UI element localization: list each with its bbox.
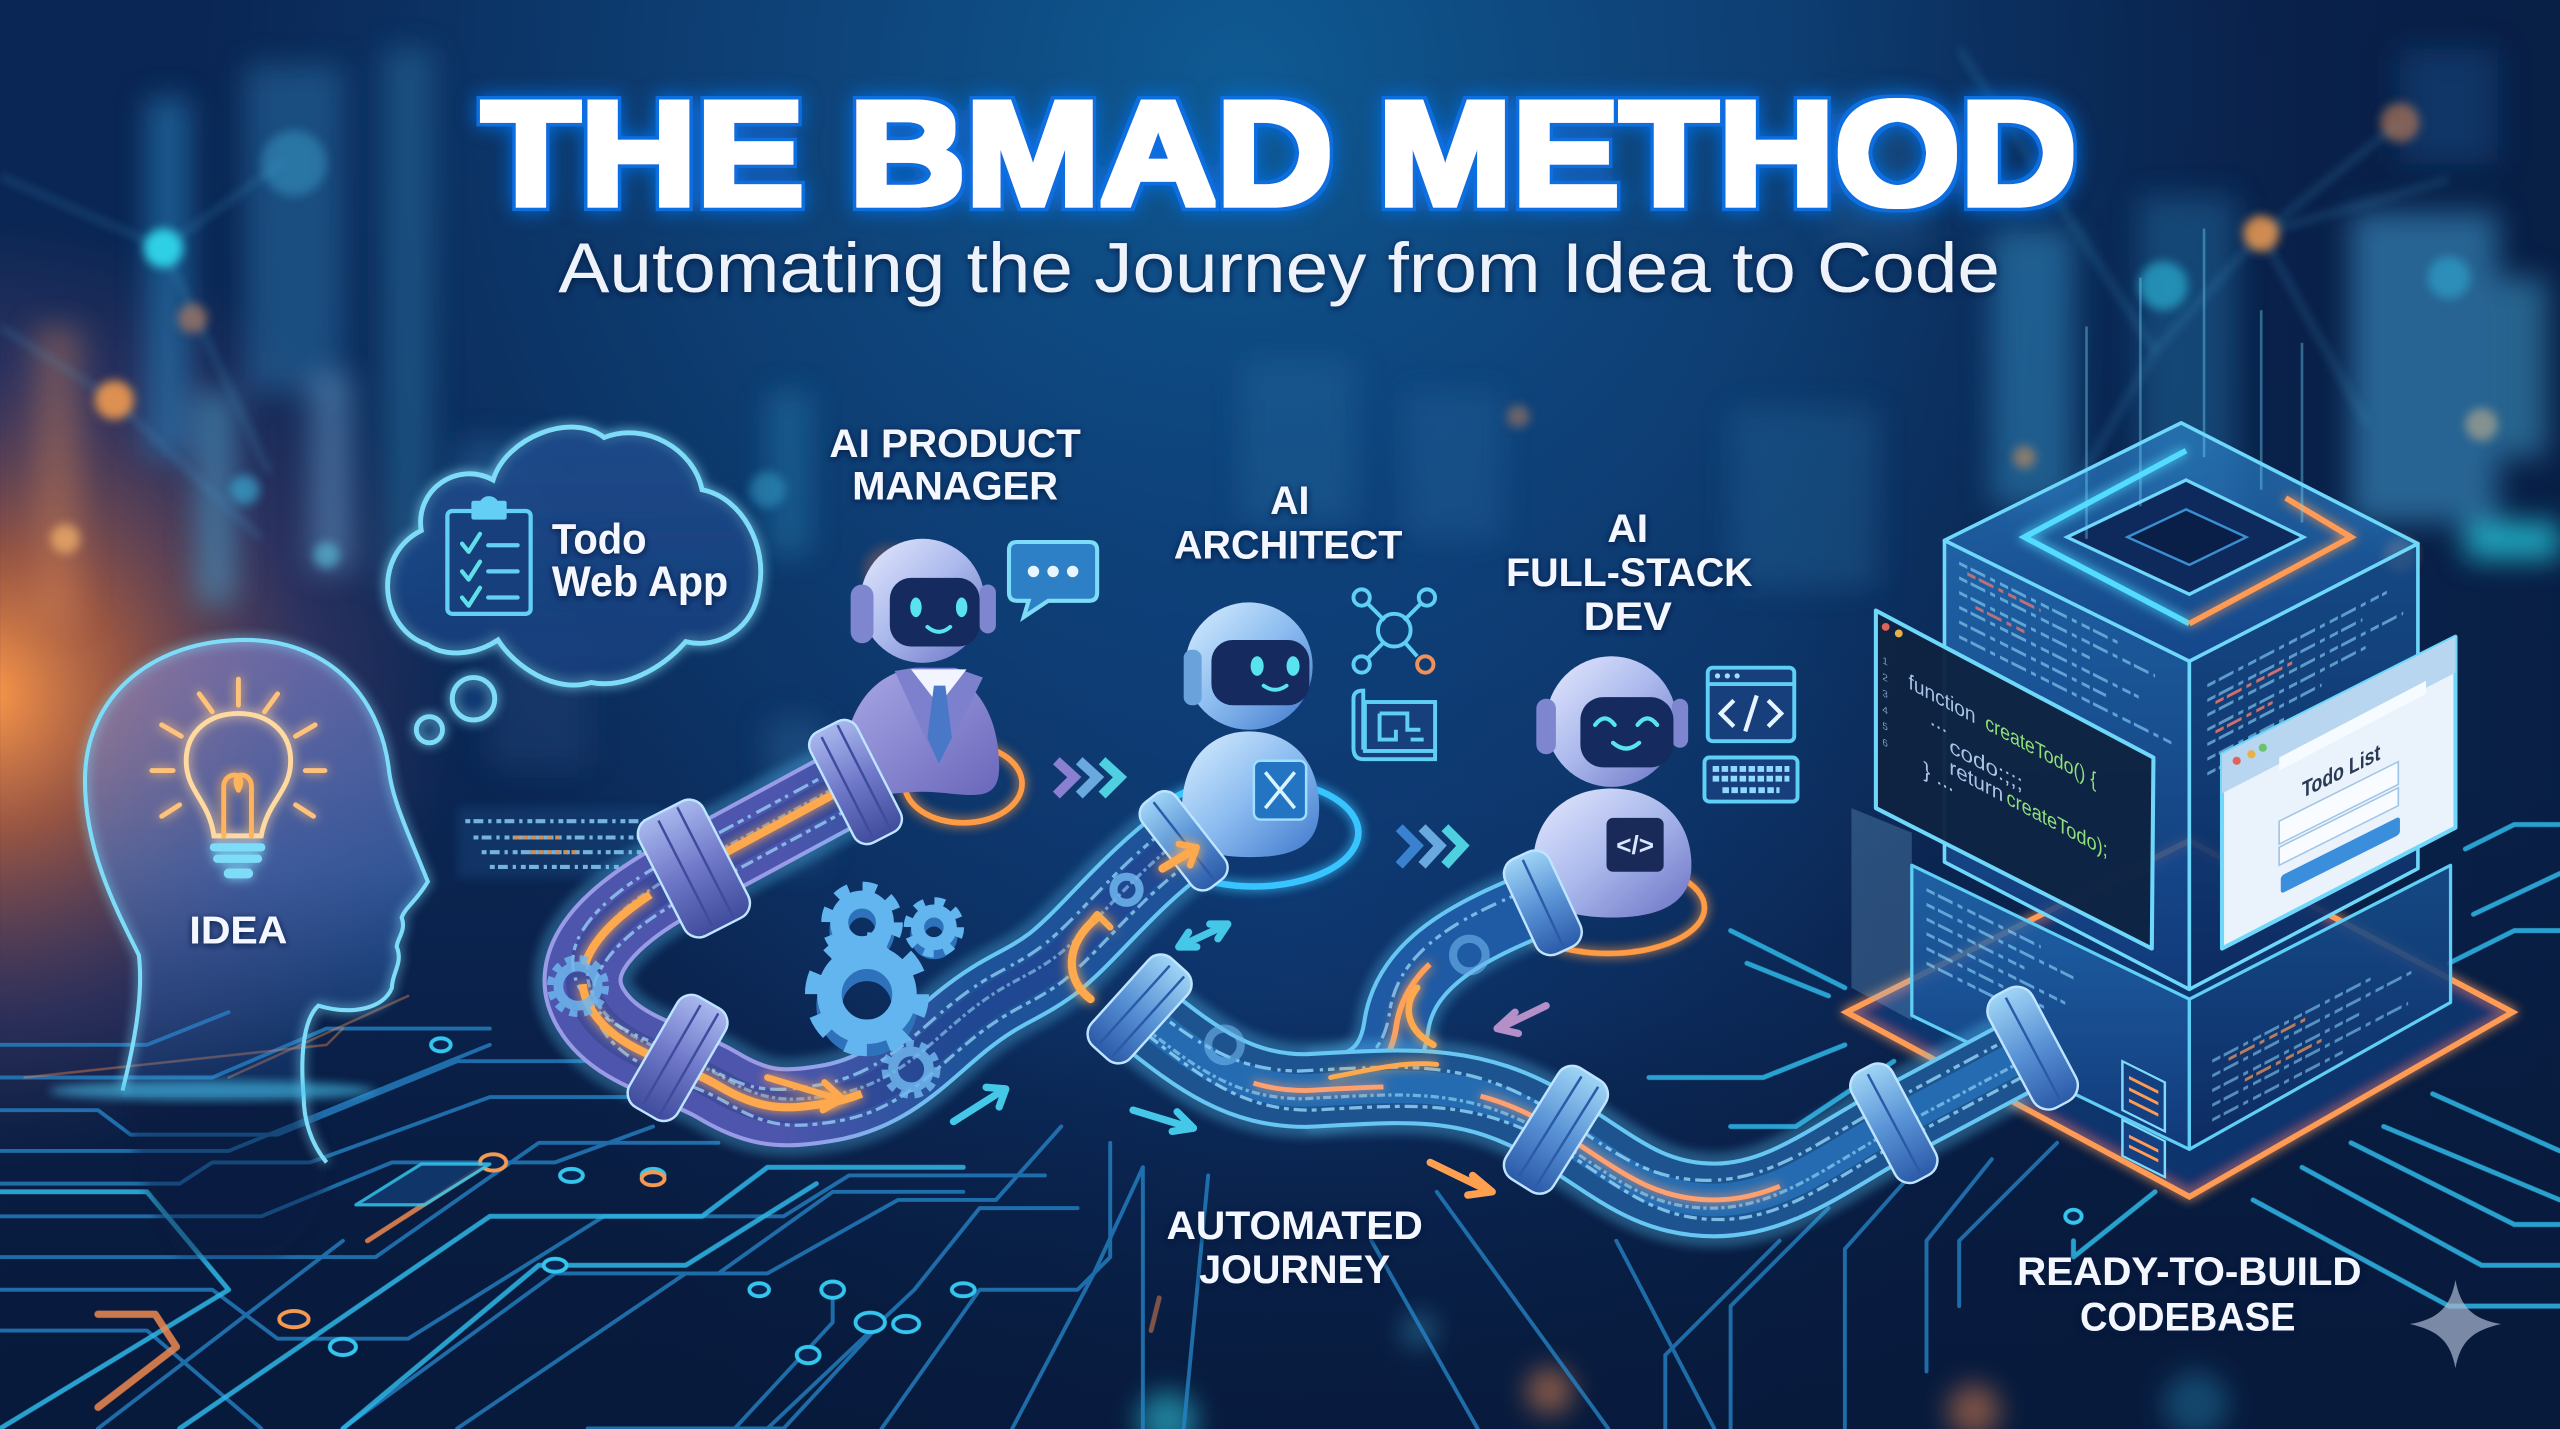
label: ready-to-build codebase: CODEBASE xyxy=(2080,1296,2295,1340)
head silhouette with idea bulb xyxy=(49,640,428,1257)
code panel: 4 xyxy=(1882,704,1888,718)
code panel: codo:;;; xyxy=(1949,733,2023,796)
code panel: 2 xyxy=(1882,672,1888,685)
icon: network xyxy=(1353,589,1435,673)
icon: keyboard xyxy=(1704,758,1798,802)
icon: sparkle watermark xyxy=(2410,1280,2501,1368)
label: AI product manager: MANAGER xyxy=(852,465,1058,509)
label: automated journey xyxy=(1167,1204,1423,1292)
label: AI architect: AI xyxy=(1270,479,1309,523)
label: AI product manager: AI PRODUCT xyxy=(829,422,1081,466)
top opening xyxy=(2024,451,2351,624)
label: AI product manager xyxy=(829,422,1081,509)
robot: AI product manager xyxy=(829,422,1097,823)
label: ready-to-build codebase: READY-TO-BUILD xyxy=(2017,1250,2362,1294)
code panel xyxy=(1876,611,2153,949)
isometric codebase tower xyxy=(1847,229,2513,1197)
orange floor diamond xyxy=(1847,841,2513,1197)
pipe branch: to full-stack dev xyxy=(1300,886,1543,1091)
icon: code window xyxy=(1708,668,1794,741)
code panel: createTodo() { xyxy=(1985,709,2097,793)
pipe segment: to codebase xyxy=(1136,996,2046,1220)
pipe flanges xyxy=(622,715,2084,1200)
label: todo web app xyxy=(552,515,728,605)
label: AI architect xyxy=(1174,479,1402,567)
orange ring xyxy=(1512,862,1704,953)
data streaks entering pipeline xyxy=(457,806,661,878)
thought bubbles xyxy=(416,678,495,743)
label: automated journey: JOURNEY xyxy=(1199,1248,1391,1292)
icon: clipboard xyxy=(447,498,531,614)
code panel: ... xyxy=(1930,704,1947,738)
code panel: } ... xyxy=(1923,756,1954,797)
curved orange flow arrows xyxy=(767,844,1437,1110)
gears inside pipe xyxy=(550,877,1486,1095)
blurred city bokeh right xyxy=(1992,49,2560,558)
label: idea: IDEA xyxy=(189,910,287,953)
code panel: createTodo); xyxy=(2006,784,2108,862)
pipeline: automated journey xyxy=(550,715,2084,1220)
orange ring xyxy=(905,744,1022,823)
glass column light xyxy=(1851,808,1912,1020)
label: AI architect: ARCHITECT xyxy=(1174,523,1402,567)
chevrons: first step xyxy=(1056,761,1120,795)
code panel: 6 xyxy=(1882,737,1888,750)
label: AI full-stack dev: DEV xyxy=(1584,595,1672,639)
chevrons: second step xyxy=(1399,828,1463,865)
vertical scan lines xyxy=(2086,229,2302,539)
blue ring xyxy=(1149,779,1358,886)
label: todo web app: Web App xyxy=(552,558,728,605)
title: THE BMAD METHOD xyxy=(482,72,2077,236)
icon: blueprint xyxy=(1353,691,1435,759)
icon: speech bubble xyxy=(1009,542,1097,617)
thought cloud: todo web app xyxy=(388,427,761,743)
robot: AI full-stack dev: </> xyxy=(1616,830,1654,860)
blurred city bokeh left xyxy=(33,49,1927,865)
browser panel: Todo List xyxy=(2302,739,2380,804)
label: automated journey: AUTOMATED xyxy=(1167,1204,1423,1248)
lower block xyxy=(1912,865,2451,1149)
label: todo web app: Todo xyxy=(552,515,647,562)
label: AI full-stack dev: FULL-STACK xyxy=(1506,551,1753,595)
head reflection shadow xyxy=(122,1091,327,1257)
code panel: 1 xyxy=(1882,655,1888,669)
label: AI full-stack dev: AI xyxy=(1607,507,1648,551)
upper cube xyxy=(1944,423,2418,989)
label: ready-to-build codebase xyxy=(2017,1250,2362,1340)
subtitle: Automating the Journey from Idea to Code xyxy=(558,228,2000,307)
label: AI full-stack dev xyxy=(1506,507,1753,639)
code panel: function xyxy=(1909,669,1975,728)
gears: process xyxy=(811,886,960,1050)
robot: AI architect xyxy=(1149,479,1435,886)
circuit board traces xyxy=(0,824,2560,1429)
code panel: 5 xyxy=(1882,721,1888,734)
pipe segment: idea to architect xyxy=(573,759,1205,1125)
robot: AI full-stack dev xyxy=(1506,507,1798,953)
browser panel xyxy=(2222,637,2455,949)
code panel: return xyxy=(1949,754,2003,807)
small flow arrows xyxy=(953,924,1546,1195)
code panel: 3 xyxy=(1882,688,1888,701)
icon: light bulb xyxy=(152,679,325,873)
